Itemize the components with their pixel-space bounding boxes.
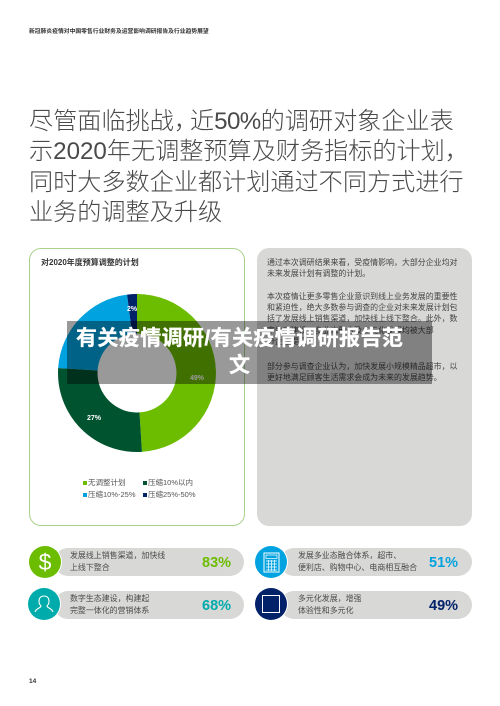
title: 同时大多数企业都计划通过不同方式进行 — [29, 169, 464, 196]
stat: multi-format 51%: 51% — [429, 555, 458, 571]
chart legend — [83, 478, 196, 499]
commentary text: 本次疫情让更多零售企业意识到线上业务发展的重要性 — [267, 292, 458, 300]
commentary text: 未来发展计划有调整的计划。 — [267, 269, 370, 278]
title — [29, 108, 469, 226]
stat: multi-format 51%: 便利店、购物中心、电商相互融合 — [298, 563, 417, 572]
commentary text: 分企业提及。 — [267, 337, 315, 346]
stat: diversification 49% — [255, 588, 472, 620]
donut chart — [58, 294, 216, 452]
donut chart: 49% — [190, 375, 205, 382]
stat: diversification 49%: 体验性和多元化 — [298, 606, 354, 615]
overlay banner title — [67, 321, 432, 384]
stat: online sales 83%: 发展线上销售渠道，加快线 — [70, 551, 165, 560]
overlay banner title: 有关疫情调研/有关疫情调研报告范 — [76, 327, 403, 350]
chart heading: 对2020年度预算调整的计划 — [41, 258, 139, 267]
overlay banner title: 文 — [229, 354, 250, 377]
commentary text: 和紧迫性，绝大多数参与调查的企业对未来发展计划包 — [267, 303, 458, 312]
stat: digital ecosystem 68%: 68% — [202, 598, 231, 614]
stat: online sales 83%: 上线下整合 — [70, 563, 110, 572]
running header: 新冠肺炎疫情对中国零售行业财务及运营影响调研报告及行业趋势展望 — [29, 29, 209, 35]
commentary text — [267, 258, 458, 382]
panel: budget donut chart — [29, 248, 245, 526]
stat: multi-format 51%: 发展多业态融合体系，超市、 — [298, 551, 401, 560]
chart legend: 无调整计划 — [88, 478, 126, 487]
commentary text: 括了发展线上销售渠道，加快线上线下整合。此外，数 — [267, 314, 458, 323]
title: 示2020年无调整预算及财务指标的计划， — [29, 138, 469, 165]
page number: 14 — [29, 678, 36, 685]
stat: digital ecosystem 68%: 完整一体化的营销体系 — [70, 606, 149, 615]
commentary text: 通过本次调研结果来看，受疫情影响，大部分企业均对 — [267, 258, 458, 267]
title: 尽管面临挑战，近50%的调研对象企业表 — [29, 108, 454, 135]
commentary text: 字生态建设、多业态融合及多元化发展均被大部 — [267, 326, 434, 335]
stat: online sales 83%: 83% — [202, 555, 231, 571]
stat: online sales 83% — [29, 546, 244, 578]
chart legend: 压缩10%以内 — [148, 478, 193, 487]
stat: diversification 49%: 49% — [429, 598, 458, 614]
stat: online sales 83%: $ — [39, 549, 52, 575]
chart legend: 压缩25%-50% — [148, 490, 196, 499]
stat: digital ecosystem 68% — [28, 588, 244, 620]
title: 业务的调整及升级 — [29, 199, 222, 226]
commentary text: 更好地满足顾客生活需求会成为未来的发展趋势。 — [267, 373, 442, 382]
stat: multi-format 51% — [255, 546, 472, 578]
chart legend: 压缩10%-25% — [88, 490, 136, 499]
panel: commentary — [257, 248, 472, 526]
donut chart: 27% — [87, 415, 102, 422]
commentary text: 部分参与调查企业认为，加快发展小规模精品超市，以 — [267, 362, 458, 370]
donut chart: 2% — [127, 306, 138, 313]
stat: digital ecosystem 68%: 数字生态建设，构建起 — [70, 594, 149, 603]
stat: diversification 49%: 多元化发展，增强 — [298, 594, 362, 603]
